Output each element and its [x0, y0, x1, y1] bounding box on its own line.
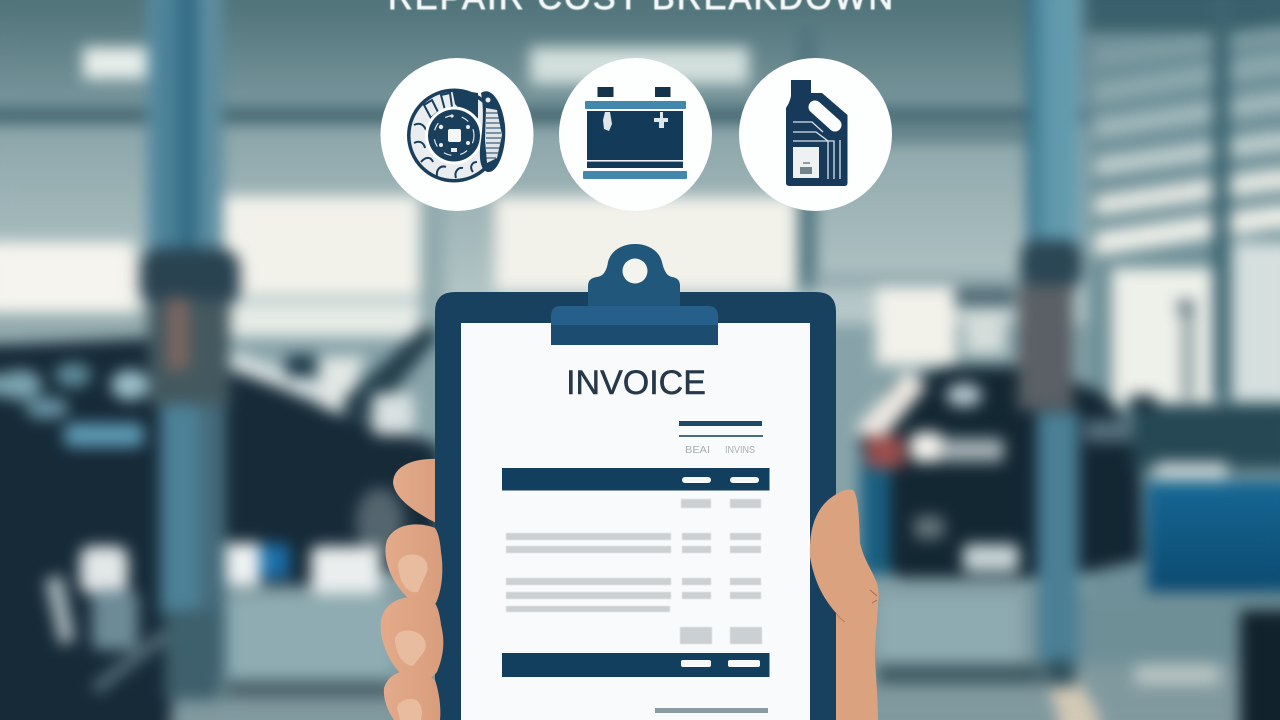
floor [0, 588, 1280, 720]
right lift pillar [1027, 0, 1081, 250]
table rows [506, 499, 762, 644]
invoice meta: INVINS [725, 445, 755, 456]
right shutter door [1087, 0, 1280, 610]
invoice meta [679, 421, 763, 456]
icon: car battery [559, 58, 712, 211]
icon: brake disc [380, 58, 534, 211]
invoice meta: BEAI [685, 445, 710, 456]
table header bar [502, 468, 770, 490]
hand: right thumb and palm [810, 489, 879, 720]
hand: fingers over clipboard [381, 524, 443, 720]
left lift pillar [147, 0, 223, 255]
total bar [502, 653, 770, 677]
invoice heading: INVOICE [566, 364, 706, 402]
right car [860, 366, 1142, 578]
icon: motor oil jug [739, 58, 892, 211]
blue equipment [1133, 404, 1280, 468]
invoice sheet [461, 323, 810, 720]
clipboard [435, 244, 836, 720]
windows [222, 196, 420, 295]
fingernails [395, 554, 428, 720]
hand: index finger behind clipboard [393, 459, 440, 525]
signature line [655, 708, 768, 713]
left car [0, 338, 440, 720]
clip [551, 244, 718, 345]
ceiling lights [83, 47, 149, 79]
